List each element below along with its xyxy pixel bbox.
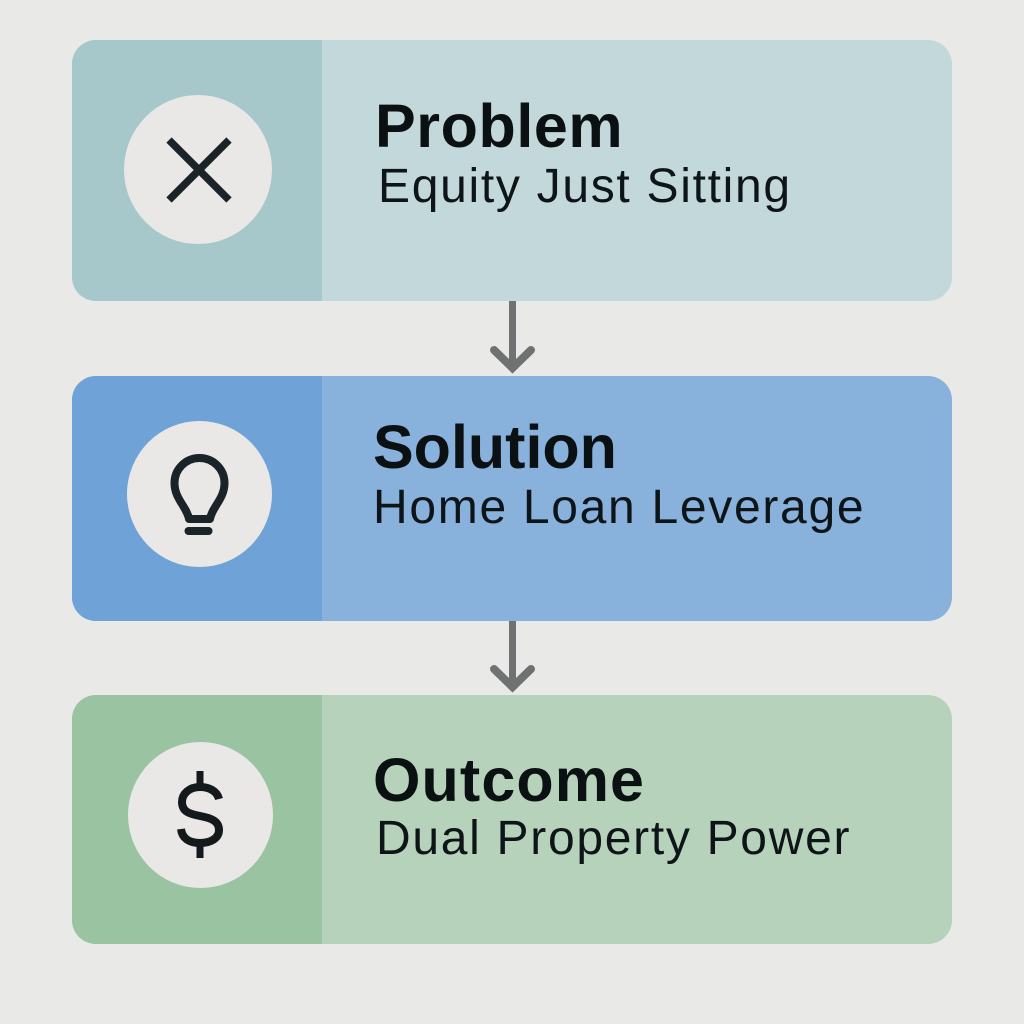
problem text: Equity Just Sitting	[378, 160, 792, 213]
solution text: Home Loan Leverage	[373, 481, 865, 534]
outcome icon circle	[128, 742, 273, 888]
problem heading: Problem	[375, 92, 623, 160]
icon: dollar sign	[177, 771, 223, 858]
icon: cross	[166, 137, 232, 203]
outcome heading: Outcome	[373, 746, 645, 814]
arrow: problem to solution	[490, 301, 535, 374]
panel: outcome	[72, 695, 952, 944]
solution heading: Solution	[373, 413, 617, 481]
problem icon circle	[124, 95, 272, 244]
solution icon circle	[127, 421, 272, 567]
problem icon band	[72, 40, 322, 301]
arrow: solution to outcome	[490, 621, 535, 692]
panel: solution	[72, 376, 952, 621]
icon: light bulb	[170, 454, 228, 535]
solution icon band	[72, 376, 322, 621]
outcome text: Dual Property Power	[376, 812, 851, 865]
panel: problem	[72, 40, 952, 301]
outcome icon band	[72, 695, 322, 944]
